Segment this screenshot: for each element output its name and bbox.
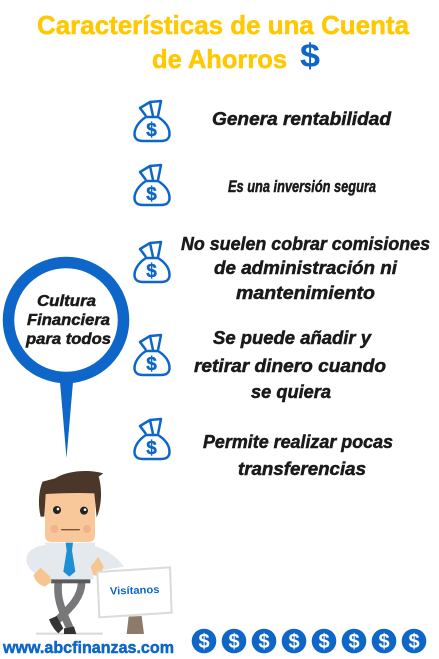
dollar coins row: $ [318, 631, 330, 653]
text: No suelen cobrar comisiones [181, 234, 430, 303]
eyes [53, 506, 61, 514]
text: Permite realizar pocas transferencias: transferencias [238, 459, 366, 479]
dollar coins row: $ [288, 631, 300, 653]
icon: title dollar sign: $ [300, 37, 320, 74]
dollar coins row: $ [348, 631, 360, 653]
text: No suelen cobrar comisiones: No suelen cobrar comisiones [181, 234, 430, 254]
speech pin: Cultura Financiera para todos: para todos [25, 331, 111, 348]
text: Se puede añadir y retirar dinero: retirar dinero cuando [194, 356, 386, 376]
hair [39, 471, 103, 517]
text: Se puede añadir y retirar dinero: Se puede añadir y [213, 328, 372, 348]
ground shadow [36, 633, 103, 635]
title: Características de una Cuenta [37, 10, 410, 40]
face [45, 487, 95, 542]
text: Genera rentabilidad: Genera rentabilidad [212, 109, 392, 129]
icon: money bag 2: $ [146, 184, 157, 205]
sign label: Visítanos [110, 584, 160, 598]
title: de Ahorros [152, 44, 287, 74]
icon: money bag 2 [134, 165, 170, 205]
dollar coins row: $ [258, 631, 270, 653]
icon: money bag 1: $ [146, 120, 157, 141]
icon: money bag 4: $ [146, 354, 157, 375]
text: Se puede añadir y retirar dinero [194, 328, 386, 402]
sign post [127, 616, 144, 634]
icon: money bag 3: $ [146, 261, 157, 282]
sign [97, 567, 172, 617]
illustration: businessman leaning on sign [26, 471, 172, 635]
text: Permite realizar pocas transferencias [203, 432, 393, 479]
hand right [91, 557, 104, 577]
text: No suelen cobrar comisiones: mantenimiento [236, 283, 375, 303]
dollar coins row: $ [378, 631, 390, 653]
dollar coins row [192, 629, 426, 653]
hand left [33, 568, 52, 587]
text: Es una inversión segura: Es una inversión segura [228, 178, 376, 196]
shirt and arms [26, 543, 124, 579]
speech pin: Cultura Financiera para todos [8, 262, 124, 458]
dollar coins row: $ [228, 631, 240, 653]
shoes [49, 616, 63, 633]
dollar coins row: $ [408, 631, 420, 653]
tie [63, 543, 75, 577]
cheeks and mouth [50, 525, 58, 533]
icon: money bag 4 [134, 335, 170, 375]
speech pin: Cultura Financiera para todos: Financiera [27, 312, 110, 329]
icon: money bag 5 [134, 419, 170, 459]
text: Permite realizar pocas transferencias: Permite realizar pocas [203, 432, 393, 452]
speech pin: Cultura Financiera para todos: Cultura [37, 293, 96, 310]
belt [51, 578, 90, 583]
icon: money bag 1 [134, 101, 170, 141]
title [37, 10, 410, 74]
icon: money bag 5: $ [146, 438, 157, 459]
website url: www.abcfinanzas.com [2, 638, 174, 657]
dollar coins row: $ [198, 631, 210, 653]
text: No suelen cobrar comisiones: de administración ni [214, 258, 398, 278]
legs [58, 582, 82, 628]
text: Se puede añadir y retirar dinero: se quiera [251, 382, 331, 402]
icon: money bag 3 [134, 242, 170, 282]
